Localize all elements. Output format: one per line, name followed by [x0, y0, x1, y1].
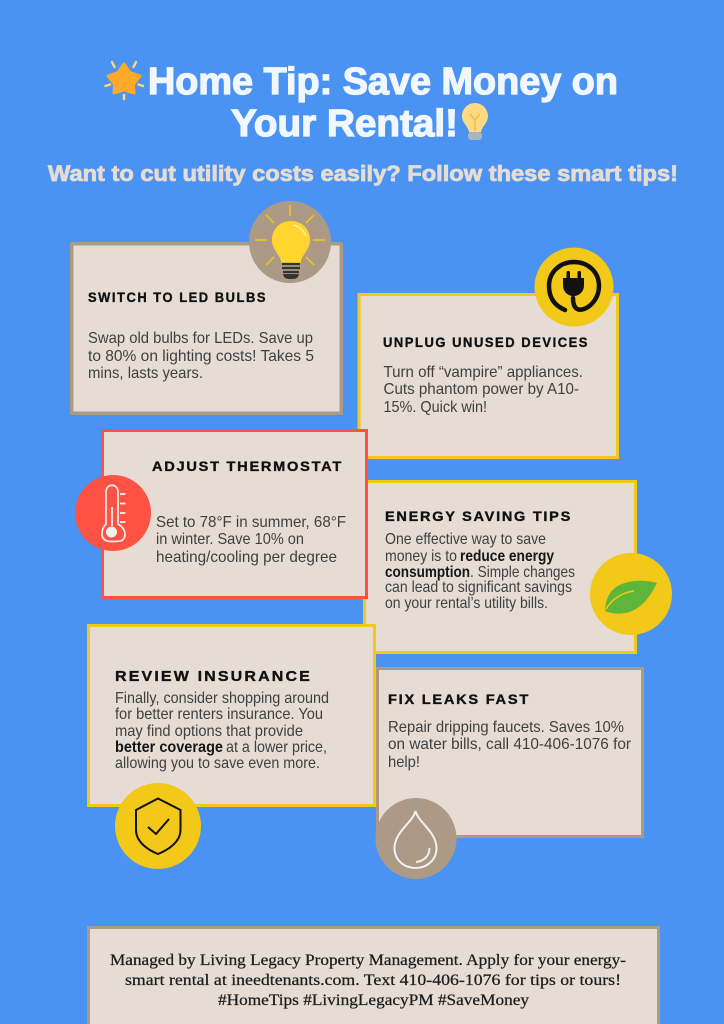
- panel: unplug unused devices: [359, 248, 618, 458]
- text block: energy saving: One effective way to save: [385, 531, 546, 548]
- text block: leaks: on water bills, call 410-406-1076 for: [388, 736, 631, 753]
- panel: fix leaks fast: [376, 668, 642, 879]
- text block: LED bulbs: Swap old bulbs for LEDs. Save up: [88, 330, 313, 347]
- text block: energy saving: [385, 531, 575, 612]
- text block: insurance: allowing you to save even more.: [115, 755, 320, 772]
- text block: insurance: for better renters insurance. You: [115, 706, 323, 723]
- icon: water drop badge: [376, 798, 456, 879]
- icon: thermometer badge: [75, 475, 151, 551]
- heading: adjust thermostat: ADJUST THERMOSTAT: [152, 459, 343, 474]
- heading: energy saving tips: ENERGY SAVING TIPS: [385, 509, 572, 524]
- text block: unplug devices: [384, 364, 583, 416]
- text block: leaks: Repair dripping faucets. Saves 10%: [388, 719, 624, 736]
- title: Home Tip: Save Money on: [148, 61, 618, 103]
- panel: footer: [88, 928, 658, 1024]
- text block: unplug devices: Cuts phantom power by A10-: [384, 381, 579, 398]
- text block: insurance: Finally, consider shopping around: [115, 690, 329, 707]
- icon: glowing star: [106, 62, 143, 99]
- text block: energy saving: on your rental’s utility bills.: [385, 595, 548, 612]
- text block: footer contact details: smart rental at ineedtenants.com. Text 410-406-1076 for tips or tours!: [125, 972, 621, 989]
- panel: switch to LED bulbs: [72, 201, 341, 413]
- heading: fix leaks fast: FIX LEAKS FAST: [388, 692, 530, 707]
- text block: thermostat: in winter. Save 10% on: [156, 531, 304, 548]
- icon: shield badge: [115, 783, 201, 869]
- panel: review insurance: [88, 626, 374, 869]
- text block: LED bulbs: [88, 330, 314, 382]
- text block: leaks: help!: [388, 754, 420, 771]
- title: [148, 61, 618, 145]
- text block: unplug devices: Turn off “vampire” appliances.: [384, 364, 583, 381]
- text block: thermostat: heating/cooling per degree: [156, 549, 337, 566]
- title: Your Rental!: [231, 103, 458, 145]
- text block: thermostat: Set to 78°F in summer, 68°F: [156, 514, 346, 531]
- heading: review insurance: REVIEW INSURANCE: [115, 668, 312, 685]
- text block: footer contact details: Managed by Living Legacy Property Management. Apply for your energy-: [110, 952, 626, 969]
- text block: energy saving: can lead to significant savings: [385, 579, 572, 596]
- icon: plug badge: [534, 248, 614, 326]
- text block: energy saving: reduce energy: [460, 548, 554, 565]
- text block: energy saving: . Simple changes: [470, 564, 575, 581]
- text block: footer contact details: [110, 952, 626, 1009]
- panel: energy saving tips: [364, 482, 672, 652]
- text block: unplug devices: 15%. Quick win!: [384, 399, 487, 416]
- icon: title light bulb: [462, 103, 488, 140]
- text block: insurance: [115, 690, 329, 772]
- heading: switch to LED bulbs: SWITCH TO LED BULBS: [88, 290, 267, 305]
- icon: light bulb badge: [249, 201, 331, 283]
- text block: insurance: may find options that provide: [115, 723, 303, 740]
- text block: energy saving: money is to: [385, 548, 457, 565]
- text block: energy saving: consumption: [385, 564, 470, 581]
- heading: unplug unused devices: UNPLUG UNUSED DEVICES: [383, 335, 589, 350]
- text block: footer contact details: #HomeTips #LivingLegacyPM #SaveMoney: [218, 992, 529, 1009]
- icon: leaf badge: [590, 553, 672, 635]
- text block: leaks: [388, 719, 631, 771]
- text block: thermostat: [156, 514, 346, 566]
- text block: LED bulbs: mins, lasts years.: [88, 365, 203, 382]
- panel: adjust thermostat: [75, 430, 366, 598]
- subtitle: Want to cut utility costs easily? Follow these smart tips!: [48, 161, 678, 186]
- text block: insurance: better coverage: [115, 739, 223, 756]
- text block: LED bulbs: to 80% on lighting costs! Takes 5: [88, 348, 314, 365]
- text block: insurance: at a lower price,: [226, 739, 327, 756]
